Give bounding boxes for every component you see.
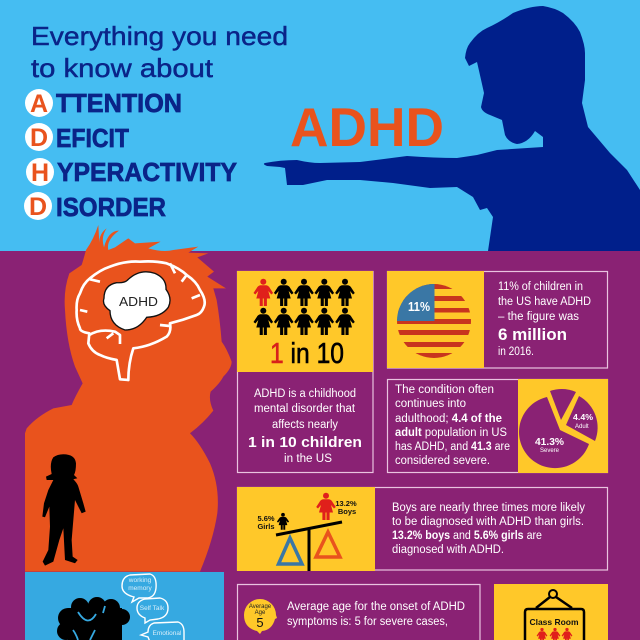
illustration: orange head with brain [25,225,232,572]
text: childhood disorder [248,388,362,465]
icon: ADHD thought cloud: ADHD [119,294,158,309]
callout: emotional: Emotional [153,630,182,637]
callout: self talk: Self Talk [140,605,165,612]
title: Everything you need [31,21,288,51]
pie chart: 4.4% [573,412,593,422]
body background [0,251,640,640]
icon: yellow head with age 5: Age [255,610,266,616]
text: continues into adulthood: has ADHD, and 41.3 are [395,441,510,453]
text: 6 million: 11% of children in [498,281,583,293]
panel: 1 in 10 [237,271,373,472]
icon: yellow head with age 5: Average [249,604,272,610]
icon: ADHD thought cloud [103,272,170,330]
text: onset age [287,601,465,628]
icon: brain outline [77,261,205,380]
title [31,21,288,83]
acronym list: TTENTION [56,88,182,118]
pie chart: 41.3% [535,436,565,448]
panel: class room [494,584,608,640]
icon: balance scale: 5.6% [257,514,275,523]
acronym list: D [30,124,48,152]
callout: emotional [141,622,184,640]
text: onset age: Average age for the onset of ADHD [287,601,465,613]
acronym list: A [30,90,48,118]
title: to know about [31,53,214,83]
text: continues into adulthood: considered severe. [395,455,490,467]
callout: working memory [122,574,156,602]
text: diagnosis rates: diagnosed with ADHD. [392,544,504,556]
text: 6 million [498,281,591,358]
text: childhood disorder: affects nearly [272,419,338,431]
callout: self talk [137,598,168,623]
text: onset age: symptoms is: 5 for severe cases, [287,616,448,628]
panel: boys vs girls [237,487,608,571]
heading: ADHD: ADHD [290,96,444,158]
text: continues into adulthood: The condition often [395,384,494,396]
acronym list [24,88,237,222]
text: continues into adulthood [395,384,510,467]
panel: average age [238,584,480,640]
icon: balance scale: Girls [257,522,275,531]
pie chart [519,389,598,468]
text: 6 million: 6 million [498,325,567,344]
acronym list: EFICIT [56,123,129,153]
icon: yellow head with age 5 [244,599,277,634]
panel: adulthood [388,379,608,473]
text: childhood disorder: 1 in 10 children [248,435,362,451]
panel: executive functions [25,572,224,640]
icon: balance scale: Boys [338,507,356,516]
pie chart: Adult [575,424,589,430]
text: childhood disorder: mental disorder that [254,403,356,415]
text: continues into adulthood: continues into [395,398,466,410]
icon: black brain [57,597,130,640]
pie chart: Severe [540,448,560,454]
acronym list: H [31,159,49,187]
text: 6 million: – the figure was [498,311,579,323]
text: diagnosis rates: 13.2% boys and 5.6% girls are [392,530,542,542]
silhouette: pointing boy [264,6,640,251]
text: diagnosis rates [392,502,585,556]
text: childhood disorder: ADHD is a childhood [254,388,356,400]
text: continues into adulthood: adult population in US [395,427,507,439]
icon: flag circle [397,284,471,358]
icon: balance scale [257,493,357,571]
stat: 1 in 10: 1 in 10 [270,338,344,370]
text: 6 million: the US have ADHD [498,296,591,308]
icon: ten people [253,279,355,335]
icon: class room sign: Class Room [529,617,579,627]
callout: working memory: memory [128,585,152,592]
text: diagnosis rates: Boys are nearly three times more likely [392,502,585,514]
silhouette: small child [42,454,86,566]
header background [0,0,640,251]
text: childhood disorder: in the US [284,453,332,465]
panel: 11 percent of children [387,271,608,368]
text: 6 million: in 2016. [498,346,534,358]
text: continues into adulthood: adulthood; 4.4 of the [395,413,502,425]
acronym list: D [29,193,47,221]
acronym list: ISORDER [56,192,166,222]
label: 11%: 11% [408,300,430,314]
callout: working memory: working [128,577,152,584]
text: diagnosis rates: to be diagnosed with ADHD than girls. [392,516,584,528]
acronym list: YPERACTIVITY [57,157,237,187]
icon: yellow head with age 5: 5 [256,615,264,630]
icon: balance scale: 13.2% [335,499,357,508]
